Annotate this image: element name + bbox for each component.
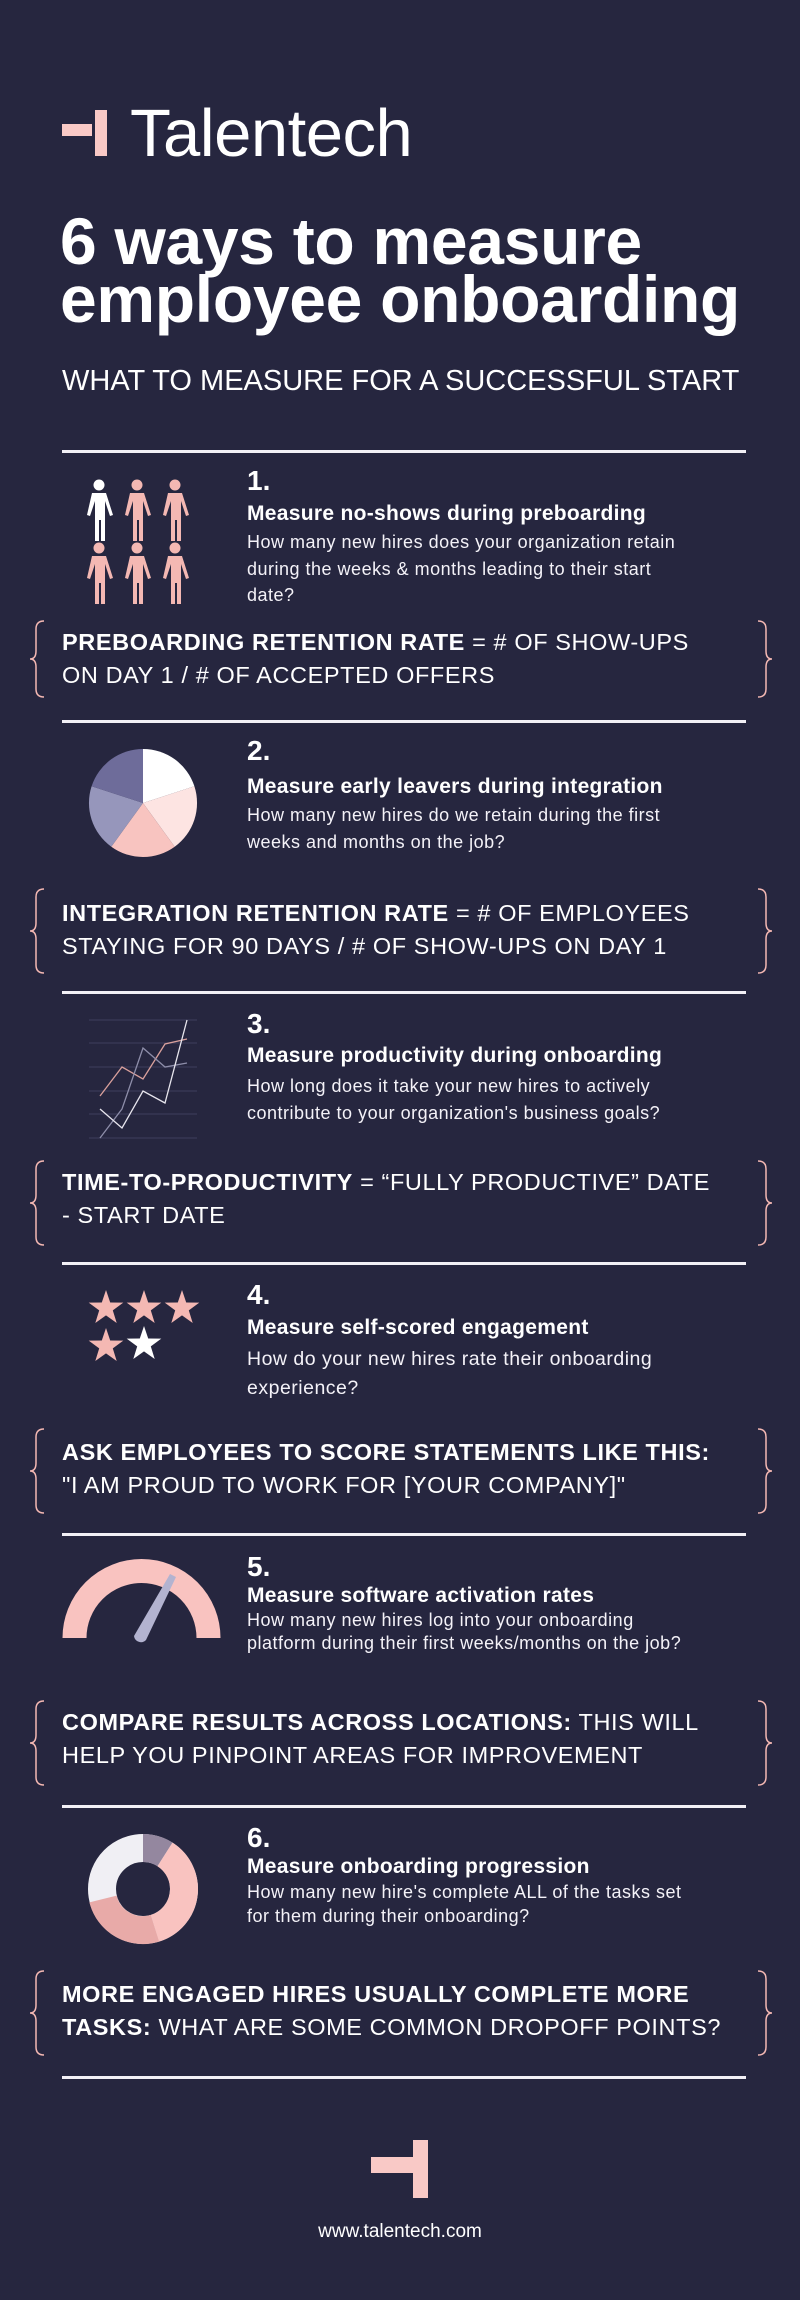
title: employee onboarding [60,262,740,336]
heading: Measure early leavers during integration [247,775,663,798]
panel: section 2 [89,735,663,857]
number: 2. [247,735,270,766]
heading: Measure self-scored engagement [247,1316,589,1339]
panel: section 6 [88,1822,681,1944]
body text: How do your new hires rate their onboarding [247,1348,652,1370]
body text [247,1882,681,1926]
callout: formula 1: PREBOARDING RETENTION RATE = # OF SHOW-UPS [62,629,689,655]
body text [247,1610,681,1653]
body text: platform during their first weeks/months on the job? [247,1633,681,1653]
callout: dropoff [30,1970,772,2056]
brand name: Talentech [130,96,412,171]
callout: compare: COMPARE RESULTS ACROSS LOCATIONS: THIS WILL [62,1709,699,1735]
callout: statement: ASK EMPLOYEES TO SCORE STATEMENTS LIKE THIS: [62,1439,710,1465]
callout: formula 2 [30,888,772,974]
title: 6 ways to measure [60,204,642,278]
number: 3. [247,1008,270,1039]
number: 5. [247,1551,270,1582]
body text: How long does it take your new hires to actively [247,1076,650,1096]
heading: Measure software activation rates [247,1584,594,1607]
number: 4. [247,1279,270,1310]
callout: statement [30,1428,772,1514]
panel: section 5 [62,1551,681,1653]
icon: gauge [62,1559,220,1642]
subtitle: WHAT TO MEASURE FOR A SUCCESSFUL START [62,365,739,397]
heading: Measure no-shows during preboarding [247,502,646,525]
callout: formula 1 [30,620,772,698]
callout: formula 2: INTEGRATION RETENTION RATE = # OF EMPLOYEES [62,900,690,926]
callout: formula 2: STAYING FOR 90 DAYS / # OF SHOW-UPS ON DAY 1 [62,933,667,959]
body text: weeks and months on the job? [247,832,505,852]
body text: How many new hires log into your onboarding [247,1610,634,1630]
panel: section 4 [88,1279,652,1399]
body text [247,1348,652,1399]
callout: compare: HELP YOU PINPOINT AREAS FOR IMPROVEMENT [62,1742,643,1768]
number: 1. [247,465,270,496]
callout: compare [30,1700,772,1786]
body text: How many new hire's complete ALL of the tasks set [247,1882,681,1902]
icon: pie chart [89,749,197,857]
body text: How many new hires do we retain during the first [247,805,660,825]
callout: formula 3 [30,1160,772,1246]
footer url: www.talentech.com [318,2221,482,2242]
body text: experience? [247,1377,359,1399]
callout: formula 3: TIME-TO-PRODUCTIVITY = “FULLY PRODUCTIVE” DATE [62,1169,710,1195]
body text: How many new hires does your organization retain [247,532,675,552]
icon: line chart [89,1020,197,1138]
callout: formula 1: ON DAY 1 / # OF ACCEPTED OFFERS [62,662,495,688]
body text [247,805,660,852]
heading: Measure onboarding progression [247,1855,590,1878]
icon: footer logo [371,2140,428,2198]
number: 6. [247,1822,270,1853]
callout: dropoff: MORE ENGAGED HIRES USUALLY COMPLETE MORE [62,1981,689,2007]
body text: contribute to your organization's business goals? [247,1102,660,1122]
callout: statement: "I AM PROUD TO WORK FOR [YOUR COMPANY]" [62,1472,626,1498]
body text: date? [247,585,295,605]
logo [62,96,412,171]
body text [247,1076,660,1123]
body text: during the weeks & months leading to their start [247,558,651,578]
callout: formula 3: - START DATE [62,1202,225,1228]
body text [247,532,675,605]
icon: stars [88,1290,200,1361]
body text: for them during their onboarding? [247,1906,530,1926]
title [60,204,740,336]
icon: logo mark [62,110,107,156]
icon: people [87,480,189,604]
callout: dropoff: TASKS: WHAT ARE SOME COMMON DROPOFF POINTS? [62,2014,721,2040]
panel: section 3 [89,1008,662,1138]
heading: Measure productivity during onboarding [247,1044,662,1067]
panel: section 1 [87,465,675,605]
icon: donut chart [88,1834,198,1944]
